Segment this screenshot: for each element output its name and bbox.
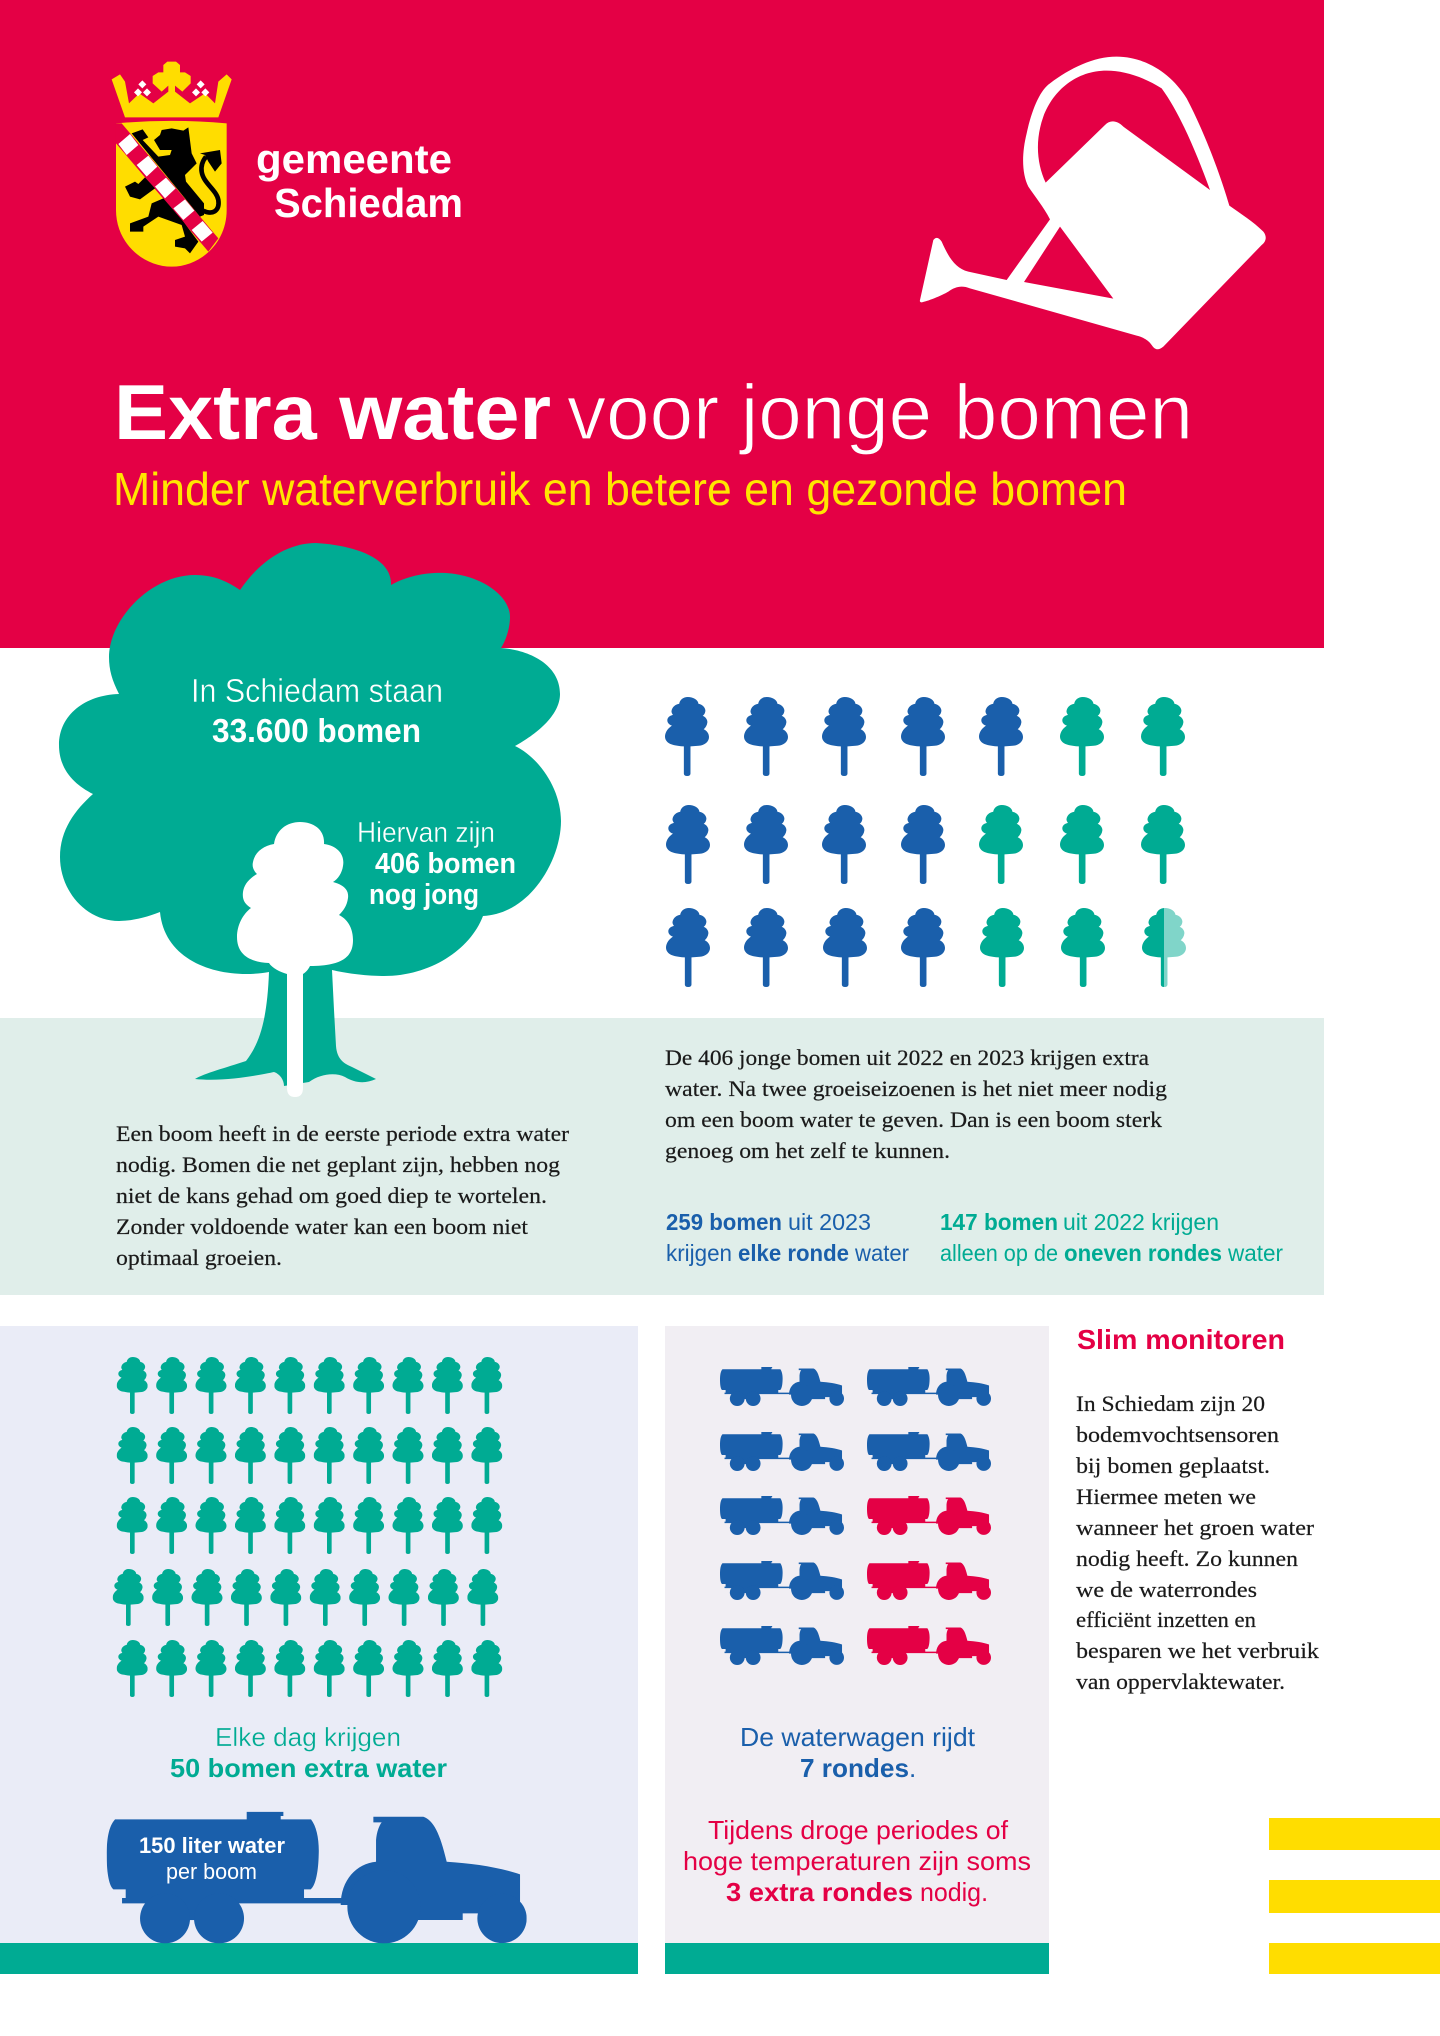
- stat: 259 trees from 2023: water: [854, 1240, 909, 1266]
- text: 7 rounds: De waterwagen rijdt: [740, 1722, 976, 1752]
- text block: why young trees need water: Een boom heeft in de eerste periode extra water: [116, 1121, 570, 1146]
- text block: monitoring: we de waterrondes: [1076, 1577, 1257, 1602]
- text: 3 extra rounds: 3 extra rondes: [726, 1877, 913, 1907]
- text block: monitoring: Hiermee meten we: [1076, 1484, 1256, 1509]
- text: 3 extra rounds: Tijdens droge periodes of: [708, 1815, 1009, 1845]
- icon: watering can: [920, 57, 1266, 349]
- pictogram: 50 trees daily: [113, 1357, 502, 1697]
- text block: monitoring: wanneer het groen water: [1076, 1515, 1315, 1540]
- stat: 259 trees from 2023: 259 bomen: [666, 1209, 782, 1235]
- logo wordmark: gemeente: [256, 136, 452, 182]
- text block: monitoring: bij bomen geplaatst.: [1076, 1453, 1270, 1478]
- ground bar: middle panel: [665, 1943, 1049, 1974]
- logo wordmark: Schiedam: [274, 180, 463, 226]
- text: 150 liter per tree: per boom: [166, 1859, 257, 1884]
- panel: daily trees: [0, 1326, 638, 1944]
- heading: Slim monitoren: Slim monitoren: [1077, 1324, 1285, 1355]
- text block: monitoring: [1076, 1391, 1319, 1694]
- large green tree: [59, 543, 561, 1086]
- text block: 406 young trees: om een boom water te geven. Dan is een boom sterk: [665, 1107, 1162, 1132]
- ground bar: left panel: [0, 1943, 638, 1974]
- text block: 406 young trees: [665, 1045, 1167, 1163]
- stat: 147 trees from 2022: water: [1227, 1240, 1283, 1266]
- stat: 259 trees from 2023: [666, 1209, 909, 1266]
- text: 7 rounds: .: [909, 1753, 916, 1783]
- tree text: young: nog jong: [369, 879, 479, 911]
- panel: red header: [0, 0, 1324, 648]
- stat: 259 trees from 2023: krijgen: [666, 1240, 732, 1266]
- subtitle: Minder waterverbruik en betere en gezonde bomen: [113, 463, 1127, 515]
- pictogram: 35 trees blue and green: [665, 697, 1190, 990]
- text block: why young trees need water: nodig. Bomen die net geplant zijn, hebben nog: [116, 1152, 560, 1177]
- text block: monitoring: van oppervlaktewater.: [1076, 1669, 1285, 1694]
- stat: 147 trees from 2022: alleen op de: [940, 1240, 1058, 1266]
- text block: monitoring: nodig heeft. Zo kunnen: [1076, 1546, 1298, 1571]
- panel: pale green band: [0, 1018, 1324, 1295]
- icon: coat of arms: [112, 62, 232, 267]
- text block: 406 young trees: water. Na twee groeiseizoenen is het niet meer nodig: [665, 1076, 1167, 1101]
- tree text: total: 33.600 bomen: [212, 712, 421, 749]
- text block: 406 young trees: De 406 jonge bomen uit 2022 en 2023 krijgen extra: [665, 1045, 1149, 1070]
- text: 3 extra rounds: hoge temperaturen zijn soms: [683, 1846, 1031, 1876]
- text: 50 trees per day: [170, 1722, 447, 1783]
- stat: 147 trees from 2022: 147 bomen: [940, 1209, 1058, 1235]
- text block: monitoring: efficiënt inzetten en: [1076, 1607, 1256, 1632]
- logo wordmark: [256, 136, 463, 226]
- text block: 406 young trees: genoeg om het zelf te kunnen.: [665, 1138, 950, 1163]
- text: 50 trees per day: Elke dag krijgen: [215, 1722, 401, 1752]
- text block: monitoring: besparen we het verbruik: [1076, 1638, 1319, 1663]
- stat: 259 trees from 2023: elke ronde: [738, 1240, 849, 1266]
- decorative yellow stripes: [1269, 1818, 1440, 1974]
- text block: monitoring: In Schiedam zijn 20: [1076, 1391, 1265, 1416]
- tree text: total: In Schiedam staan: [191, 672, 443, 709]
- title: voor jonge bomen: [567, 368, 1193, 456]
- text: 3 extra rounds: [683, 1815, 1031, 1907]
- text block: monitoring: bodemvochtsensoren: [1076, 1422, 1279, 1447]
- text: 150 liter per tree: [139, 1833, 285, 1884]
- text: 7 rounds: 7 rondes: [800, 1753, 909, 1783]
- text: 50 trees per day: 50 bomen extra water: [170, 1753, 447, 1783]
- text block: why young trees need water: Zonder voldoende water kan een boom niet: [116, 1214, 528, 1239]
- text: 7 rounds: [740, 1722, 976, 1783]
- title: Extra water: [114, 368, 551, 456]
- white young tree: [237, 822, 353, 1097]
- logo: gemeente Schiedam: [112, 62, 463, 267]
- stat: 147 trees from 2022: uit 2022 krijgen: [1063, 1209, 1219, 1235]
- title: [114, 368, 1193, 456]
- text block: why young trees need water: [116, 1121, 570, 1270]
- tree text: total: [191, 672, 443, 749]
- tree text: young: 406 bomen: [375, 848, 516, 880]
- text: 150 liter per tree: 150 liter water: [139, 1833, 285, 1858]
- text: 3 extra rounds: nodig.: [920, 1877, 988, 1907]
- panel: water wagon rounds: [665, 1326, 1049, 1944]
- pictogram: 10 water wagons: [720, 1367, 991, 1665]
- stat: 147 trees from 2022: [940, 1209, 1283, 1266]
- tree text: young: [357, 817, 516, 911]
- text block: why young trees need water: optimaal groeien.: [116, 1245, 282, 1270]
- tree text: young: Hiervan zijn: [357, 817, 495, 849]
- stat: 259 trees from 2023: uit 2023: [788, 1209, 871, 1235]
- illustration: large tree: [59, 543, 561, 1097]
- icon: large tractor with water tank: [107, 1812, 527, 1943]
- stat: 147 trees from 2022: oneven rondes: [1064, 1240, 1222, 1266]
- text block: why young trees need water: niet de kans gehad om goed diep te wortelen.: [116, 1183, 547, 1208]
